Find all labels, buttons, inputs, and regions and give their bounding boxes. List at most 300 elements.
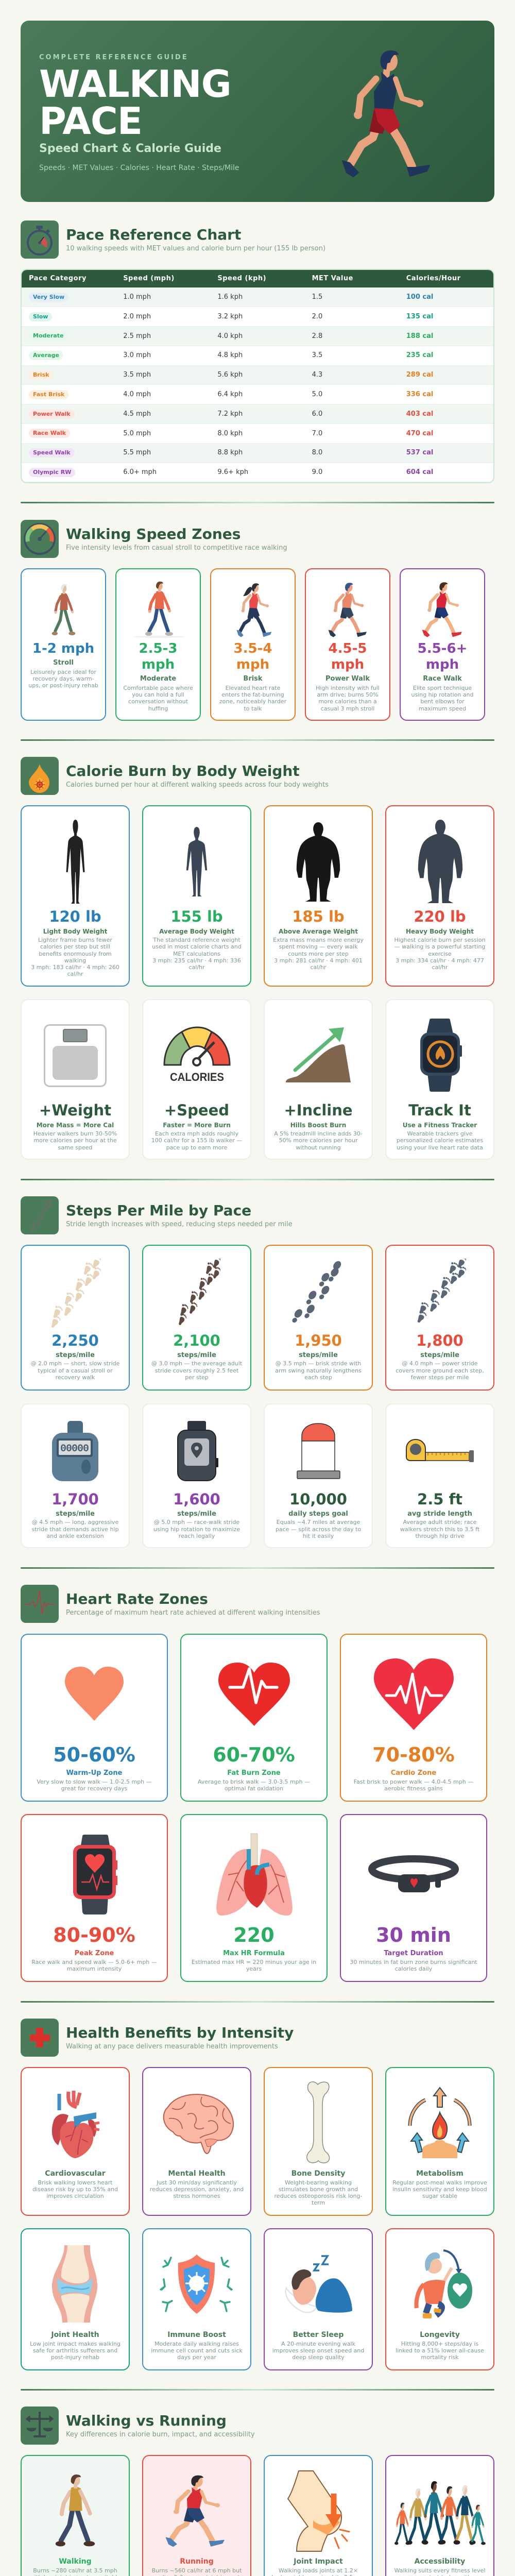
table header: Speed (mph) [123, 275, 175, 282]
description: stress hormones [173, 2193, 220, 2199]
zone name: Warm-Up Zone [66, 1769, 122, 1777]
card: 120 lb [21, 805, 130, 987]
description: Race walk and speed walk — 5.0-6+ mph — [31, 1959, 157, 1965]
silhouette: average body [186, 827, 207, 896]
icon: fitness watch [420, 1019, 462, 1092]
description: disease risk by up to 35% and [32, 2186, 118, 2193]
description: Average adult stride; race [403, 1519, 476, 1526]
description: counts more per step [288, 951, 349, 957]
card: Track It [385, 999, 494, 1160]
description: spent moving — every walk [279, 943, 357, 950]
row: brisk [22, 366, 493, 384]
section heading: Steps Per Mile [21, 1196, 494, 1234]
icon: crimson heart with pulse [374, 1658, 454, 1730]
description: sugar stable [422, 2193, 457, 2199]
description: Elite sport technique [413, 685, 472, 691]
description [22, 2567, 129, 2576]
description: personalized calorie estimates [397, 1137, 483, 1144]
section heading: Calorie Burn [21, 757, 329, 795]
section heading: Walking Speed Zones [21, 520, 287, 558]
description: bent elbows for [420, 698, 465, 705]
description [411, 685, 474, 712]
row: moderate [22, 327, 493, 346]
description: walkers stretch this to 3.5 ft [400, 1526, 479, 1533]
card: +Incline [264, 999, 373, 1160]
description: optimal fat oxidation [225, 1785, 283, 1792]
card: 2,250 steps [21, 1245, 130, 1391]
section heading: Pace Reference Chart [21, 221, 325, 259]
icon: lungs and heart [213, 1834, 296, 1916]
unit: steps/mile [420, 1351, 459, 1359]
description: stimulates bone growth and [279, 2186, 358, 2193]
description [265, 2179, 372, 2207]
description [265, 1130, 372, 1151]
description [386, 1360, 493, 1381]
icon: milestone marker [297, 1423, 340, 1479]
title: PACE [39, 99, 142, 143]
description: Low joint impact makes walking [30, 2341, 121, 2347]
description: recovery walk [56, 1374, 95, 1381]
description [33, 1130, 117, 1151]
row: power walk: 403 cal [406, 410, 433, 418]
description: using hip rotation and [411, 691, 474, 698]
illustration: moderate walker [134, 581, 184, 638]
description [219, 685, 286, 712]
description: using hip rotation to maximize [153, 1526, 240, 1533]
description: A 20-minute evening walk [281, 2341, 355, 2347]
heading text: Pace Reference Chart [66, 226, 241, 243]
zone name: Peak Zone [75, 1950, 114, 1957]
label: Target Duration [384, 1950, 443, 1957]
row: slow: 2.0 [312, 313, 322, 320]
icon: red heart with pulse [218, 1663, 290, 1726]
comparison title: Joint Impact [294, 2557, 343, 2566]
value: 50-60% [53, 1743, 135, 1766]
description: hit it easily [303, 1533, 334, 1539]
description: without running [296, 1144, 341, 1151]
heading subtitle: Five intensity levels from casual stroll to competitive race walking [66, 544, 287, 552]
description: Fast brisk to power walk — 4.0-4.5 mph — [354, 1778, 473, 1785]
speed value: mph [236, 657, 269, 672]
heading text: Calorie Burn by Body Weight [66, 762, 300, 779]
icon: fitness band [177, 1421, 218, 1481]
row: power walk: 6.0 [312, 410, 322, 418]
card: 2.5 ft [385, 1403, 494, 1548]
row: fast brisk: Fast Brisk [33, 391, 64, 398]
description: Moderate daily walking raises [154, 2341, 239, 2347]
description: years [246, 1965, 262, 1972]
benefit title: Immune Boost [167, 2331, 226, 2339]
hero banner [21, 21, 494, 202]
row: slow: 2.0 mph [123, 313, 151, 320]
description: calories per step but still [40, 943, 110, 950]
section heading: Heart Rate Zones [21, 1585, 494, 1623]
description [28, 669, 98, 689]
description: 100 cal/hr for a 155 lb walker — [151, 1137, 242, 1144]
row: moderate: 2.8 [312, 332, 322, 340]
description: and ankle extension [46, 1533, 104, 1539]
description [143, 2341, 250, 2361]
description: exercise [428, 951, 452, 957]
heading subtitle: Walking at any pace delivers measurable health improvements [66, 2043, 278, 2050]
value: 70-80% [372, 1743, 455, 1766]
title: WALKING [39, 62, 231, 106]
value: +Speed [164, 1101, 229, 1119]
description [143, 1130, 250, 1151]
value: 1,700 [52, 1490, 99, 1508]
description [31, 937, 119, 977]
value: 220 [233, 1924, 274, 1946]
description [386, 2179, 493, 2199]
zone name: Fat Burn Zone [227, 1769, 281, 1777]
illustration: runner [164, 2475, 226, 2548]
description: Heavier walkers burn 30-50% [33, 1130, 117, 1137]
description: cal/hr [310, 964, 327, 971]
card: accessibility [385, 2455, 494, 2576]
card: mental health [142, 2067, 251, 2216]
description: covers more ground each step, [396, 1367, 484, 1374]
description [341, 1959, 486, 1973]
row: brisk: 3.5 mph [123, 371, 151, 379]
row: power walk [22, 404, 493, 423]
description: @ 3.0 mph — the average adult [151, 1360, 242, 1367]
description [143, 1360, 250, 1381]
card: joint impact [264, 2455, 373, 2576]
description [265, 2341, 372, 2361]
row: race walk: 5.0 mph [123, 430, 151, 437]
value: 1,600 [173, 1490, 220, 1508]
row: brisk: Brisk [33, 371, 49, 378]
card: 155 lb [142, 805, 251, 987]
card: better sleep [264, 2228, 373, 2370]
row: speed walk: 8.8 kph [217, 449, 243, 456]
description: post-injury rehab [51, 2354, 99, 2361]
hero subtitle: Speed Chart & Calorie Guide [39, 142, 221, 155]
description: using your live heart rate data [397, 1144, 483, 1151]
description: deep sleep quality [292, 2354, 345, 2361]
description: 50% more calories per hour [279, 1137, 358, 1144]
row: speed walk [22, 444, 493, 463]
benefit title: Bone Density [291, 2170, 345, 2178]
icon: hill with arrow [286, 1027, 351, 1082]
heading text: Walking vs Running [66, 2412, 227, 2429]
table header: Speed (kph) [217, 275, 266, 282]
description [152, 937, 242, 971]
label: Hills Boost Burn [290, 1122, 346, 1129]
benefit title: Longevity [420, 2331, 460, 2339]
description: enters the fat-burning [221, 691, 284, 698]
description: reduces depression, anxiety, and [150, 2186, 244, 2193]
description [273, 937, 364, 971]
illustration: metabolism figure [409, 2088, 471, 2158]
card: +Weight [21, 999, 130, 1160]
description [22, 1959, 167, 1973]
card: cardiovascular [21, 2067, 130, 2216]
row: olympic race walk: Olympic RW [33, 469, 71, 476]
row: average: 235 cal [406, 351, 433, 359]
heading text: Steps Per Mile by Pace [66, 1202, 251, 1219]
description: @ 4.0 mph — power stride [402, 1360, 478, 1367]
description: ups, or post-injury rehab [28, 682, 98, 689]
speed value: 4.5-5 [329, 641, 367, 656]
row: race walk [29, 429, 433, 438]
comparison title: Accessibility [415, 2557, 465, 2566]
description [394, 937, 486, 971]
description: 30 minutes in fat burn zone burns significant [350, 1959, 477, 1965]
value: 2,250 [52, 1332, 99, 1349]
table header [22, 270, 493, 477]
description: 3 mph: 334 cal/hr · 4 mph: 477 [396, 957, 484, 964]
row: fast brisk: 4.0 mph [123, 391, 151, 398]
illustration: knee joint [52, 2245, 97, 2323]
description: 3 mph: 235 cal/hr · 4 mph: 336 [152, 957, 241, 964]
benefit title: Better Sleep [293, 2331, 344, 2339]
weight label: Above Average Weight [279, 928, 358, 935]
card: 1,800 steps [385, 1245, 494, 1391]
description: @ 3.5 mph — brisk stride with [276, 1360, 361, 1367]
zone name: Stroll [53, 659, 74, 667]
description: safe for arthritis sufferers and [33, 2347, 117, 2354]
description: Estimated max HR = 220 minus your age in [192, 1959, 316, 1965]
description: stride that demands active hip [31, 1526, 119, 1533]
row: olympic race walk: 604 cal [406, 468, 433, 476]
card: immune boost [142, 2228, 251, 2370]
unit: steps/mile [177, 1351, 216, 1359]
card: max HR formula [180, 1814, 328, 1982]
description: improves sleep onset speed and [272, 2347, 364, 2354]
card: 1,600 steps [142, 1403, 251, 1548]
card: warm-up zone [21, 1634, 168, 1802]
heading subtitle: Stride length increases with speed, reducing steps needed per mile [66, 1221, 293, 1228]
table header: Pace Category [29, 275, 87, 282]
description: arm swing naturally lengthens [275, 1367, 362, 1374]
unit: steps/mile [56, 1351, 95, 1359]
description [386, 2341, 493, 2361]
description: Brisk walking lowers heart [38, 2179, 112, 2186]
description: The standard reference weight [153, 937, 241, 943]
illustration: sleeping person [284, 2255, 352, 2313]
row: slow: 135 cal [406, 313, 433, 320]
description: Weight-bearing walking [285, 2179, 352, 2186]
illustration: slim footprints [416, 1259, 466, 1323]
row: speed walk: 537 cal [406, 449, 433, 456]
weight label: Average Body Weight [159, 928, 234, 935]
row: very slow: 1.6 kph [217, 293, 243, 301]
row: slow: Slow [33, 313, 48, 320]
description [265, 2567, 372, 2576]
comparison title: Walking [59, 2557, 92, 2566]
zone name: Power Walk [325, 675, 370, 683]
value: 30 min [376, 1924, 451, 1946]
description [316, 685, 380, 712]
card: +Speed [142, 999, 251, 1160]
row: power walk: Power Walk [33, 411, 71, 417]
description: Leisurely pace ideal for [30, 669, 96, 675]
card: power walk [305, 568, 390, 721]
description: each step [304, 1374, 332, 1381]
description [386, 1519, 493, 1539]
description: Burns ~560 cal/hr at 6 mph but [152, 2567, 242, 2574]
row: race walk: 7.0 [312, 430, 322, 437]
description: reduces osteoporosis risk long- [274, 2193, 362, 2199]
hero illustration: walking man [342, 50, 430, 177]
row: moderate: Moderate [33, 332, 63, 339]
table: pace reference chart [21, 269, 494, 483]
description: Each extra mph adds roughly [155, 1130, 238, 1137]
description: Walking suits every fitness level [394, 2567, 485, 2574]
speed value [139, 641, 177, 672]
card: stroll [21, 568, 106, 721]
card: race walk [400, 568, 485, 721]
row: power walk: 4.5 mph [123, 410, 151, 418]
description [123, 685, 193, 712]
card: bone density [264, 2067, 373, 2216]
description: linked to a 51% lower all-cause [396, 2347, 484, 2354]
weight label: Heavy Body Weight [406, 928, 474, 935]
description [143, 1519, 250, 1539]
value: 60-70% [213, 1743, 295, 1766]
label: avg stride length [407, 1510, 472, 1518]
description [386, 1130, 493, 1151]
table header: Calories/Hour [406, 275, 461, 282]
description [22, 2179, 129, 2199]
label: Faster = More Burn [163, 1122, 231, 1129]
heading subtitle: Percentage of maximum heart rate achieved at different walking intensities [66, 1609, 320, 1617]
description: huffing [148, 705, 168, 712]
card: 220 lb [385, 805, 494, 987]
card: 1,700 steps [21, 1403, 130, 1548]
row: speed walk: 5.5 mph [123, 449, 151, 456]
card: fat burn zone [180, 1634, 328, 1802]
label: daily steps goal [288, 1510, 348, 1518]
heading text: Health Benefits by Intensity [66, 2024, 294, 2041]
description: 3 mph: 281 cal/hr · 4 mph: 401 [274, 957, 363, 964]
heading subtitle: Key differences in calorie burn, impact, and accessibility [66, 2431, 255, 2438]
illustration: walker [54, 2474, 96, 2548]
hero eyebrow: COMPLETE REFERENCE GUIDE [39, 54, 188, 61]
illustration: elderly walker [52, 584, 75, 636]
card: metabolism [385, 2067, 494, 2216]
illustration: human heart [51, 2090, 99, 2158]
zone name: Race Walk [423, 675, 462, 683]
card: longevity [385, 2228, 494, 2370]
description: conversation without [128, 698, 188, 705]
silhouette: heavy body [418, 820, 462, 903]
row: fast brisk: 336 cal [406, 391, 433, 398]
value: 10,000 [289, 1490, 347, 1508]
hero topics line: Speeds · MET Values · Calories · Heart Rate · Steps/Mile [39, 164, 239, 172]
icon: flame [21, 757, 59, 795]
description: Regular post-meal walks improve [392, 2179, 487, 2186]
description [22, 1360, 129, 1381]
description: great for recovery days [61, 1785, 127, 1792]
speed value: 2.5-3 [139, 641, 177, 656]
row: average: 4.8 kph [217, 351, 243, 359]
row: very slow: 1.0 mph [123, 293, 151, 301]
speed value: mph [142, 657, 175, 672]
row: race walk: Race Walk [33, 430, 66, 436]
description: reach legally [179, 1533, 215, 1539]
heading subtitle: Calories burned per hour at different walking speeds across four body weights [66, 781, 329, 789]
description: 3 mph: 183 cal/hr · 4 mph: 260 [31, 964, 119, 971]
illustration: power walker [329, 583, 367, 637]
value: Track It [408, 1101, 471, 1119]
description: Hitting 8,000+ steps/day is [401, 2341, 478, 2347]
speed value: mph [426, 657, 459, 672]
description: A 5% treadmill incline adds 30- [274, 1130, 363, 1137]
illustration: bare footprints [49, 1259, 101, 1328]
comparison title: Running [180, 2557, 214, 2566]
silhouette: light body [66, 820, 84, 904]
card: target duration [340, 1814, 487, 1982]
row: olympic race walk [29, 468, 433, 477]
description: more calories per hour at the [33, 1137, 117, 1144]
description: MET calculations [173, 951, 220, 957]
icon: medical cross [21, 2019, 59, 2057]
description: term [312, 2199, 325, 2206]
weight value: 220 lb [414, 908, 466, 925]
description: casual 3 mph stroll [321, 705, 374, 712]
description: cal/hr [188, 964, 205, 971]
icon: bathroom scale [44, 1024, 107, 1087]
speed value: 3.5-4 [234, 641, 272, 656]
heading text: Heart Rate Zones [66, 1590, 208, 1607]
benefit title: Cardiovascular [45, 2170, 106, 2178]
value: 1,950 [295, 1332, 342, 1349]
description: through hip drive [415, 1533, 465, 1539]
description: Very slow to slow walk — 1.0-2.5 mph — [37, 1778, 152, 1785]
description: pace — split across the day to [276, 1526, 361, 1533]
description: walking [64, 957, 86, 964]
value: 2,100 [173, 1332, 220, 1349]
description: typical of a casual stroll or [38, 1367, 113, 1374]
description [265, 1519, 372, 1539]
description [181, 1959, 327, 1973]
row: brisk: 5.6 kph [217, 371, 243, 379]
description: Average to brisk walk — 3.0-3.5 mph — [198, 1778, 310, 1785]
description: Just 30 min/day significantly [157, 2179, 237, 2186]
row: average: Average [33, 352, 59, 359]
value: +Incline [284, 1101, 353, 1119]
description: stride covers roughly 2.5 feet [155, 1367, 238, 1374]
icon: heart rate watch [73, 1835, 117, 1914]
icon: tape measure [406, 1439, 474, 1462]
illustration: dark footprints [177, 1259, 220, 1326]
silhouette: above average body [297, 822, 340, 902]
row: fast brisk [29, 390, 433, 399]
description: calories daily [395, 1965, 432, 1972]
benefit title: Joint Health [51, 2331, 99, 2339]
description: days per year [177, 2354, 216, 2361]
description: Comfortable pace where [123, 685, 193, 691]
row: fast brisk: 6.4 kph [217, 391, 243, 398]
description: you can hold a full [132, 691, 184, 698]
description: @ 2.0 mph — short, slow stride [31, 1360, 119, 1367]
section heading: Health Benefits [21, 2019, 494, 2057]
row: race walk: 470 cal [406, 430, 433, 437]
value: 1,800 [416, 1332, 464, 1349]
row: moderate: 4.0 kph [217, 332, 243, 340]
description: benefits enormously from [39, 951, 112, 957]
card: 2,100 steps [142, 1245, 251, 1391]
description: Walking loads joints at 1.2× [279, 2567, 358, 2574]
row: olympic race walk: 9.0 [312, 468, 322, 476]
card: walking [21, 2455, 130, 2576]
icon: pedometer [52, 1421, 98, 1481]
description: Lighter frame burns fewer [38, 937, 112, 943]
description [386, 2567, 493, 2576]
row: speed walk: 8.0 [312, 449, 322, 456]
